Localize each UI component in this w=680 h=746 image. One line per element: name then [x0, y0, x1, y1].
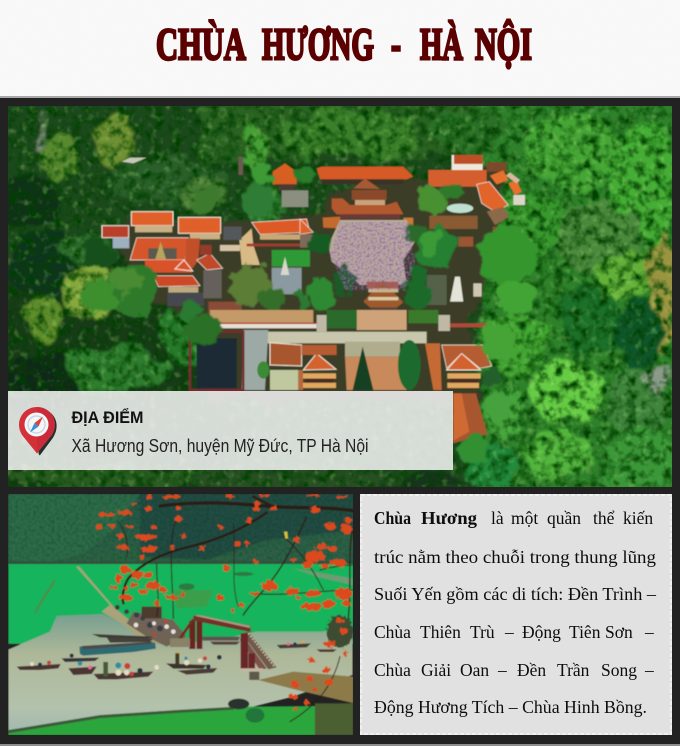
paragraph: Giải: [421, 660, 451, 680]
title: NỘI: [475, 20, 532, 70]
location panel: [8, 391, 453, 470]
dark foliage right side: [327, 615, 353, 648]
bottom edge: [0, 744, 680, 746]
mountains: [8, 494, 353, 567]
paragraph: Trù: [470, 622, 495, 642]
title: [156, 20, 532, 70]
paragraph: thể: [593, 508, 615, 528]
paragraph: –: [644, 622, 654, 642]
boats: [17, 634, 337, 679]
title: HƯƠNG: [262, 20, 374, 70]
paragraph: một: [511, 508, 538, 528]
paragraph: Động: [522, 622, 561, 642]
header band: [0, 0, 680, 98]
paragraph: Đền: [517, 660, 546, 680]
paragraph: Oan: [460, 660, 489, 680]
paragraph: quần: [547, 508, 581, 528]
paragraph: –: [504, 622, 514, 642]
paragraph: Chùa: [374, 660, 411, 680]
paragraph: Trần: [557, 660, 590, 680]
icon: location pin with compass: [19, 407, 57, 456]
lower temple buildings, gate and steps: [185, 310, 519, 465]
people on boats: [30, 641, 304, 677]
paragraph: –: [497, 660, 507, 680]
bottom grass: [8, 706, 315, 735]
central temple roofs and crowd: [300, 155, 535, 317]
fields: [8, 564, 353, 644]
trees over left temple: [82, 163, 315, 318]
red kapok blossoms: [96, 494, 352, 711]
bridge: [170, 615, 277, 680]
paragraph: là: [491, 508, 504, 528]
location heading: ĐỊA ĐIỂM: [72, 408, 144, 427]
paragraph: Hương: [421, 508, 477, 528]
far bank: [258, 672, 353, 703]
paragraph: Suối Yến gồm các di tích: Đền Trình –: [374, 584, 656, 604]
paragraph: trúc nằm theo chuỗi trong thung lũng: [374, 547, 656, 567]
paragraph: Sơn: [605, 622, 633, 642]
paragraph: –: [644, 660, 654, 680]
paragraph: Thiên: [420, 622, 461, 642]
paragraph: Tiên: [569, 622, 601, 642]
river: [8, 614, 353, 731]
paragraph: Chùa: [374, 622, 411, 642]
paragraph: Song: [601, 660, 637, 680]
trees over central temple: [305, 224, 535, 317]
paragraph: [374, 508, 656, 717]
location address: Xã Hương Sơn, huyện Mỹ Đức, TP Hà Nội: [72, 435, 368, 456]
title: CHÙA: [156, 20, 246, 70]
temple ground: [120, 165, 505, 400]
paragraph: Động Hương Tích – Chùa Hinh Bồng.: [374, 697, 647, 717]
paragraph: kiến: [623, 508, 653, 528]
photo: river boats and red kapok blossoms: [8, 494, 353, 735]
left temple roofs: [82, 157, 315, 318]
title: -: [391, 20, 401, 70]
tree branches: [117, 497, 353, 722]
text panel: description: [360, 494, 672, 735]
title: HÀ: [420, 20, 463, 70]
dirt path: [76, 567, 167, 645]
crowd on the bank: [127, 612, 187, 647]
photo: aerial view of Chùa Hương complex: [8, 106, 672, 487]
paragraph: Chùa: [374, 508, 411, 528]
